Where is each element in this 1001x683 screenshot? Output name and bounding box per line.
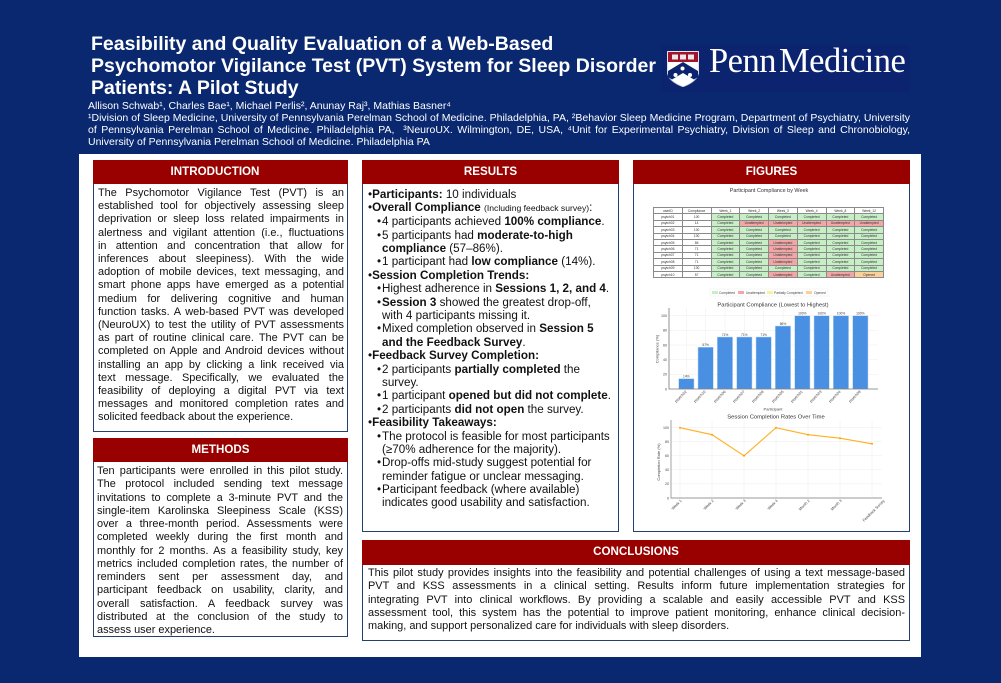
table legend [710, 289, 828, 296]
text block: methods: distributed at the conclusion of the study to [97, 611, 343, 623]
bar chart: participant compliance: Compliance (%) [654, 334, 660, 363]
line chart y axis: 60 [665, 454, 669, 458]
table: participant compliance by week: Completed [717, 260, 733, 264]
table legend: Opened [814, 291, 826, 295]
text block: results: • [377, 430, 381, 443]
text block: methods: monthly for 2 months. As a feasibility study, key [97, 544, 343, 556]
table: participant compliance by week: Week_2 [748, 209, 760, 213]
heading: figures [633, 160, 910, 184]
logo: Penn Medicine [661, 45, 910, 92]
text block: results: • [377, 456, 381, 469]
text block: results [368, 188, 611, 509]
text block: introduction: as part of routine clinical care. The PVT can be [98, 332, 344, 344]
table: participant compliance by week: Completed [746, 260, 762, 264]
bars [679, 316, 868, 389]
bar chart x axis: psytch08 [751, 390, 765, 403]
bar value labels: 100% [837, 312, 845, 316]
table: participant compliance by week: Completed [775, 215, 791, 219]
heading: methods [93, 438, 348, 462]
text block: conclusions: This pilot study provides insights into the feasibility and potential challenges of using a text message-based [368, 567, 905, 579]
table: participant compliance by week: Completed [746, 247, 762, 251]
line chart x axis: Month 2 [798, 499, 811, 511]
table: participant compliance by week: psytch03 [661, 228, 674, 232]
line chart y axis: 0 [667, 496, 669, 500]
table: participant compliance by week: Week_3 [777, 209, 789, 213]
table: participant compliance by week: Completed [832, 266, 848, 270]
text block: conclusions: assessment tool, this system has the potential to improve patient monitoring, enhance clinical decision- [368, 607, 905, 619]
bar chart y axis: 20 [663, 373, 667, 377]
table: participant compliance by week: userID [663, 209, 673, 213]
table: participant compliance by week: Unattempted [773, 247, 792, 251]
bar chart x axis: psytch07 [732, 390, 746, 403]
table: participant compliance by week: psytch01 [661, 215, 674, 219]
table: participant compliance by week: psytch02 [661, 221, 674, 225]
line chart y axis: 80 [665, 440, 669, 444]
text block: introduction: function tasks. A web-based PVT was developed [98, 306, 344, 318]
table: participant compliance by week: Compliance [688, 209, 705, 213]
bar value labels: 71% [760, 333, 767, 337]
text block: methods: The protocol included sending text message [97, 478, 343, 490]
figures charts [654, 288, 886, 523]
table legend: Completed [719, 291, 735, 295]
title: Psychomotor Vigilance Test (PVT) System for Sleep Disorder [91, 55, 656, 77]
line chart: session completion rates: Completion Rate (%) [656, 443, 661, 481]
line chart x axis: Feedback Survey [862, 499, 886, 523]
table: participant compliance by week: Week_8 [834, 209, 846, 213]
table: participant compliance by week: Unattempted [745, 221, 764, 225]
table: participant compliance by week: Completed [804, 228, 820, 232]
bar chart: participant compliance: Participant [764, 406, 783, 412]
table: participant compliance by week: 100 [694, 234, 699, 238]
icon: Penn shield [667, 51, 699, 87]
text block: conclusions: integrating PVT into clinical workflows. By providing a scalable and easily accessible PVT and KSS [368, 594, 905, 606]
bar chart y axis: 100 [661, 314, 667, 318]
table: participant compliance by week: Completed [832, 241, 848, 245]
table: participant compliance by week: psytch05 [661, 241, 674, 245]
text block: introduction: adoption of mobile devices, text messaging, and [98, 266, 344, 278]
heading: introduction: INTRODUCTION [171, 165, 259, 178]
authors and affiliations: Allison Schwab¹, Charles Bae¹, Michael Perlis², Anunay Raj³, Mathias Basner⁴ [88, 100, 451, 112]
text block: results: 4 participants achieved 100% compliance. [382, 215, 605, 228]
text block: results: •Overall Compliance (Including feedback survey): [368, 201, 592, 214]
table: participant compliance by week: Completed [717, 247, 733, 251]
text block: introduction: alertness and vigilant attention (i.e., fluctuations [98, 227, 344, 239]
table: participant compliance by week: Completed [775, 228, 791, 232]
table: participant compliance by week: Completed [775, 266, 791, 270]
text block: results: • [377, 389, 381, 402]
panel: methods [93, 438, 348, 637]
table: participant compliance by week: Completed [804, 247, 820, 251]
text block: introduction: (NeuroUX) to test the utility of PVT assessments [98, 319, 344, 331]
table: participant compliance by week: 71 [695, 247, 698, 251]
text block: methods [97, 465, 344, 636]
text block: methods: single-item Karolinska Sleepiness Scale (KSS) [97, 505, 343, 517]
heading: results [362, 160, 619, 184]
text block: results: • [377, 296, 381, 309]
table: participant compliance by week: Unattempted [831, 273, 850, 277]
text block: introduction [98, 187, 344, 423]
text block: methods: overall satisfaction. A feedback survey was [97, 598, 343, 610]
table: participant compliance by week: Completed [832, 228, 848, 232]
table legend: Unattempted [746, 291, 765, 295]
table: participant compliance by week: Completed [861, 260, 877, 264]
text block: introduction: The Psychomotor Vigilance Test (PVT) is an [98, 187, 344, 199]
bar value labels: 57% [702, 343, 709, 347]
text block: results: 1 participant opened but did not complete. [382, 389, 611, 402]
text block: conclusions: PVT and KSS assessments in a clinical setting. Results inform future implementation strategies for [368, 580, 905, 592]
text block: results: •Participants: 10 individuals [368, 188, 516, 200]
title [91, 33, 656, 99]
table: participant compliance by week: Completed [861, 241, 877, 245]
text block: methods: Ten participants were enrolled in this pilot study. [97, 465, 343, 477]
table: participant compliance by week: Completed [861, 234, 877, 238]
line chart y axis [663, 426, 669, 500]
table: participant compliance by week: Completed [717, 228, 733, 232]
heading: figures: FIGURES [746, 165, 797, 178]
table: participant compliance by week: 100 [694, 228, 699, 232]
authors and affiliations: ¹Division of Sleep Medicine, University of Pennsylvania Perelman School of Medicine. Philadelphia, PA, ²Behavior Sleep Medicine Program, Department of Psychiatry, University [88, 112, 910, 124]
text block: conclusions: making, and support personalized care for individuals with sleep disorders. [368, 620, 729, 632]
text block: results: indicates good usability and satisfaction. [382, 496, 590, 509]
table: participant compliance by week: 100 [694, 215, 699, 219]
table: participant compliance by week: 100 [694, 266, 699, 270]
text block: methods: assess user experience. [97, 624, 215, 636]
text block: introduction: deprivation or sleep loss related impairments in [98, 213, 344, 225]
table: participant compliance by week: Completed [775, 234, 791, 238]
table: participant compliance by week: Completed [717, 234, 733, 238]
logo wordmark: PennMedicine [709, 42, 905, 80]
text block: results: and the Feedback Survey. [382, 336, 526, 349]
text block: introduction: inferences about sleepiness). With the wide [98, 253, 344, 265]
text block: results: reminder fatigue or unclear messaging. [382, 470, 584, 483]
table: participant compliance by week: Completed [804, 253, 820, 257]
table: participant compliance by week: Completed [746, 253, 762, 257]
authors and affiliations [88, 100, 910, 148]
authors and affiliations: University of Pennsylvania Perelman School of Medicine. Philadelphia PA [88, 136, 430, 148]
text block: introduction: completed on Apple and Android devices without [98, 345, 344, 357]
table: participant compliance by week: 14 [695, 221, 698, 225]
text block: methods: completed weekly during the first month and [97, 531, 343, 543]
table: participant compliance by week: 86 [695, 241, 698, 245]
text block: results: The protocol is feasible for most participants [382, 430, 610, 443]
line chart x axis: Month 3 [830, 499, 843, 511]
bar chart title: Participant Compliance (Lowest to Highest) [717, 302, 829, 308]
text block: introduction: smart phone apps have emerged as a potential [98, 279, 344, 291]
text block: results: survey. [382, 376, 419, 389]
text block: results: with 4 participants missing it. [382, 309, 530, 322]
bar value labels: 71% [722, 333, 728, 337]
table: participant compliance by week: 71 [695, 260, 698, 264]
table: participant compliance by week: Completed [804, 234, 820, 238]
table: participant compliance by week: Completed [861, 253, 877, 257]
text block: results: Mixed completion observed in Session 5 [382, 322, 594, 335]
bar value labels: 86% [780, 322, 786, 326]
bar value labels: 14% [683, 374, 690, 378]
table: participant compliance by week: Completed [861, 215, 877, 219]
table: participant compliance by week: 71 [695, 253, 698, 257]
heading: methods: METHODS [192, 443, 249, 456]
panel: introduction [93, 160, 348, 432]
table: participant compliance by week: Completed [717, 221, 733, 225]
text block: introduction: in attention and concentration that allow for [98, 240, 344, 252]
text block: results: (≥70% adherence for the majority). [382, 443, 561, 456]
line chart y axis: 100 [663, 426, 669, 430]
text block: introduction: text message. Specifically, we evaluated the [98, 372, 344, 384]
text block: results: •Feasibility Takeaways: [368, 416, 497, 429]
text block: results: • [377, 255, 381, 268]
table: participant compliance by week: Completed [717, 273, 733, 277]
text block: conclusions [368, 567, 905, 632]
text block: results: 5 participants had moderate-to-high [382, 229, 573, 242]
table: participant compliance by week: Completed [717, 266, 733, 270]
text block: introduction: messages and monitored completion rates and [98, 398, 344, 410]
table title: participant compliance by week: Participant Compliance by Week [730, 188, 808, 194]
table: participant compliance by week: Completed [746, 273, 762, 277]
table: participant compliance by week: Completed [804, 215, 820, 219]
text block: results: • [377, 363, 381, 376]
text block: introduction: solicited feedback about the experience. [98, 411, 293, 423]
heading: conclusions [362, 540, 910, 565]
bar chart y axis [661, 314, 667, 391]
text block: methods: metrics included completion rates, the number of [97, 558, 343, 570]
bar chart x axis: psytch09 [848, 390, 862, 403]
table: participant compliance by week: Completed [861, 228, 877, 232]
line chart x axis: Week 2 [703, 499, 715, 511]
table legend: Partially Completed [774, 291, 803, 295]
table: participant compliance by week: Unattempted [773, 221, 792, 225]
authors and affiliations: of Pennsylvania Perelman School of Medicine. Philadelphia PA, ³NeuroUX. Wilmington, DE, USA, ⁴Unit for Experimental Psychiatry, Division of Sleep and Chronobiology, [88, 124, 910, 136]
table: participant compliance by week: Completed [717, 215, 733, 219]
table: participant compliance by week: Unattempted [802, 221, 821, 225]
table: participant compliance by week: Unattempted [831, 221, 850, 225]
bar chart x axis: psytch10 [693, 390, 707, 403]
title: Patients: A Pilot Study [91, 77, 299, 99]
table: participant compliance by week: Completed [746, 228, 762, 232]
line chart y axis: 20 [665, 482, 669, 486]
table: participant compliance by week: Completed [804, 273, 820, 277]
table: participant compliance by week: psytch08 [661, 260, 674, 264]
text block: results: 2 participants did not open the survey. [382, 403, 584, 416]
table: participant compliance by week: Completed [746, 266, 762, 270]
table: participant compliance by week: Week_12 [862, 209, 876, 213]
table: participant compliance by week: Completed [832, 234, 848, 238]
title: Feasibility and Quality Evaluation of a Web-Based [91, 33, 553, 55]
bar chart x axis [674, 390, 862, 403]
table: participant compliance by week: Completed [861, 266, 877, 270]
table: participant compliance by week: Week_1 [719, 209, 731, 213]
text block: results: 1 participant had low compliance (14%). [382, 255, 596, 268]
table: participant compliance by week: Completed [832, 260, 848, 264]
heading: introduction [93, 160, 348, 184]
line chart x axis: Week 1 [671, 499, 683, 511]
line chart y axis: 40 [665, 468, 669, 472]
table: participant compliance by week: Unattempted [860, 221, 879, 225]
line chart: session completion rates [656, 414, 886, 523]
bar chart x axis: psytch06 [713, 390, 727, 403]
table: participant compliance by week [653, 207, 884, 278]
table: participant compliance by week: Week_4 [806, 209, 818, 213]
table: participant compliance by week: Completed [832, 247, 848, 251]
bar value labels: 100% [817, 312, 826, 316]
bar chart x axis: psytch03 [809, 390, 823, 403]
text block: results: • [377, 322, 381, 335]
white poster sheet [79, 154, 921, 657]
table: participant compliance by week: psytch07 [661, 253, 674, 257]
text block: methods: over a three-month period. Assessments were [97, 518, 343, 530]
bar chart x axis: psytch02 [674, 390, 688, 403]
text block: results: • [377, 215, 381, 228]
table: participant compliance by week: Completed [746, 241, 762, 245]
table: participant compliance by week: Completed [832, 215, 848, 219]
line chart x axis [671, 499, 886, 523]
table: participant compliance by week: Completed [746, 234, 762, 238]
table: participant compliance by week: 57 [695, 273, 698, 277]
table: participant compliance by week: Completed [861, 247, 877, 251]
table: participant compliance by week: Completed [832, 253, 848, 257]
heading: results: RESULTS [464, 165, 517, 178]
table: participant compliance by week: Unattempted [773, 260, 792, 264]
bar chart y axis: 60 [663, 343, 667, 347]
bar value labels [683, 312, 865, 378]
text block: results: Drop-offs mid-study suggest potential for [382, 456, 591, 469]
text block: results: • [377, 229, 381, 242]
bar value labels: 71% [741, 333, 748, 337]
text block: results: compliance (57–86%). [382, 242, 503, 255]
bar chart y axis: 0 [665, 387, 667, 391]
text block: results: • [377, 403, 381, 416]
bar chart: participant compliance [654, 302, 878, 412]
bar value labels: 100% [798, 312, 807, 316]
panel: figures [633, 160, 910, 532]
bar chart y axis: 40 [663, 358, 667, 362]
table: participant compliance by week: psytch04 [661, 234, 674, 238]
text block: results: •Session Completion Trends: [368, 269, 529, 282]
table: participant compliance by week: psytch10 [661, 273, 674, 277]
bar value labels: 100% [856, 312, 865, 316]
panel: conclusions [362, 540, 910, 641]
panel: results [362, 160, 619, 532]
bar chart x axis: psytch01 [790, 390, 804, 403]
table: participant compliance by week: Unattempted [773, 253, 792, 257]
line chart x axis: Week 4 [767, 499, 779, 511]
bar chart x axis: psytch04 [828, 390, 842, 403]
table: participant compliance by week: Completed [804, 241, 820, 245]
text block: results: Session 3 showed the greatest drop-off, [382, 296, 591, 309]
table: participant compliance by week: psytch09 [661, 266, 674, 270]
text block: results: •Feedback Survey Completion: [368, 349, 539, 362]
text block: results: 2 participants partially completed the [382, 363, 580, 376]
text block: results: • [377, 483, 381, 496]
text block: introduction: established tool for objectively assessing sleep [98, 200, 344, 212]
bar chart x axis: psytch05 [771, 390, 785, 403]
table: participant compliance by week: Opened [863, 273, 875, 277]
table: participant compliance by week: Unattempted [773, 241, 792, 245]
table: participant compliance by week: Unattempted [773, 273, 792, 277]
line chart x axis: Week 3 [735, 499, 747, 511]
heading: conclusions: CONCLUSIONS [593, 545, 679, 558]
text block: introduction: medium for delivering cognitive and human [98, 293, 344, 305]
completion rate line [680, 428, 872, 456]
text block: introduction: installing an app by clicking a link received via [98, 359, 344, 371]
table: participant compliance by week: Completed [717, 253, 733, 257]
text block: methods: participant feedback on usability, clarity, and [97, 584, 343, 596]
line chart title: Session Completion Rates Over Time [727, 414, 825, 420]
table: participant compliance by week: Completed [804, 266, 820, 270]
text block: methods: invitations to complete a 3-minute PVT and the [97, 492, 343, 504]
text block: results: Highest adherence in Sessions 1, 2, and 4. [382, 282, 609, 295]
text block: methods: reminders sent per assessment day, and [97, 571, 343, 583]
table: participant compliance by week: Completed [717, 241, 733, 245]
text block: introduction: feasibility of deploying a digital PVT via text [98, 385, 344, 397]
text block: results: Participant feedback (where available) [382, 483, 579, 496]
table: participant compliance by week: psytch06 [661, 247, 674, 251]
text block: results: • [377, 282, 381, 295]
bar chart y axis: 80 [663, 329, 667, 333]
table: participant compliance by week: Completed [804, 260, 820, 264]
table: participant compliance by week: Completed [746, 215, 762, 219]
